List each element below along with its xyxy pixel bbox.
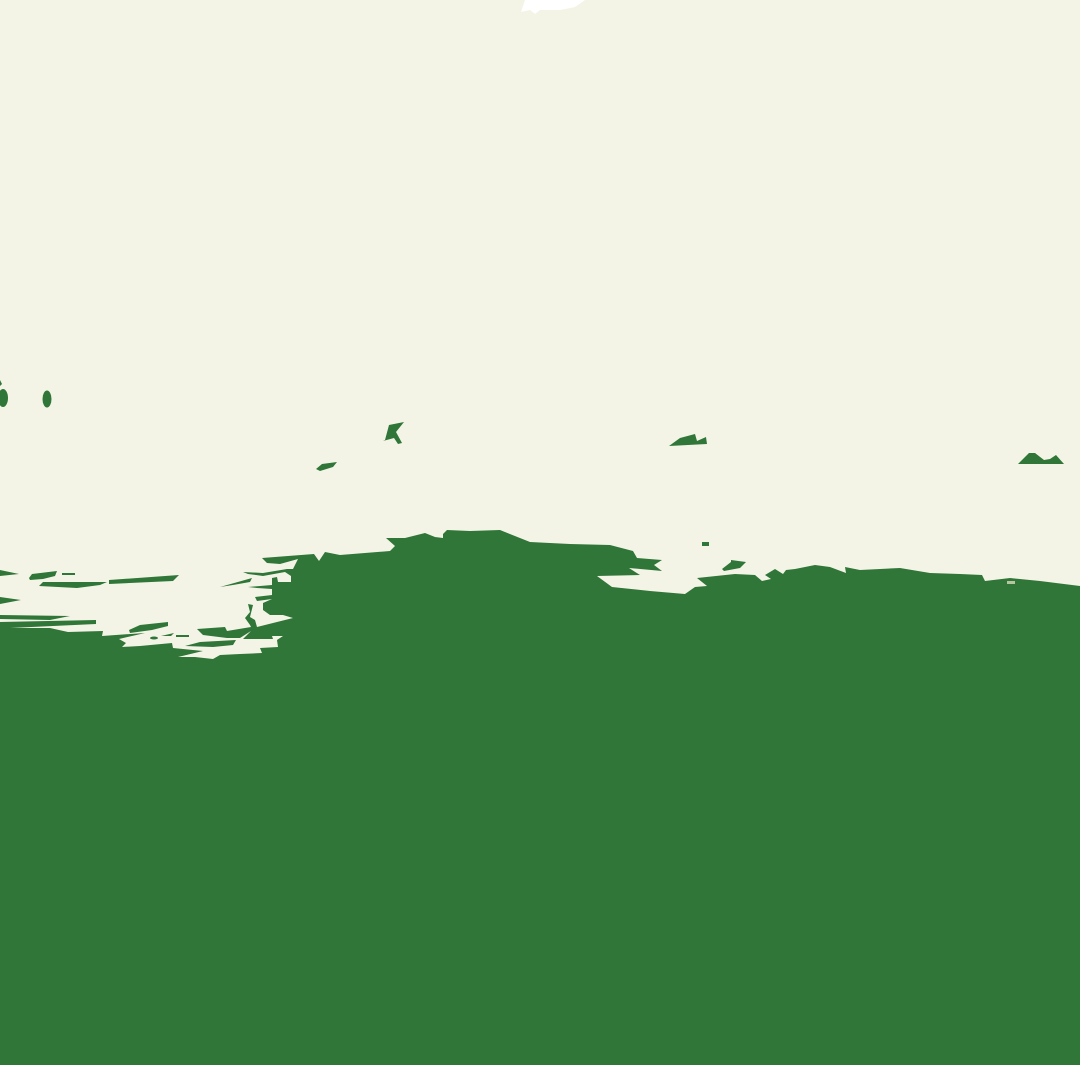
- green terrain mass: [0, 530, 1080, 1065]
- terrain islands and brush flecks: [0, 380, 1064, 647]
- pale fleck on terrain: [1007, 581, 1015, 584]
- floating flecks: [0, 380, 1064, 571]
- left brush fragments: [0, 570, 252, 647]
- white stroke at top edge: [521, 0, 585, 14]
